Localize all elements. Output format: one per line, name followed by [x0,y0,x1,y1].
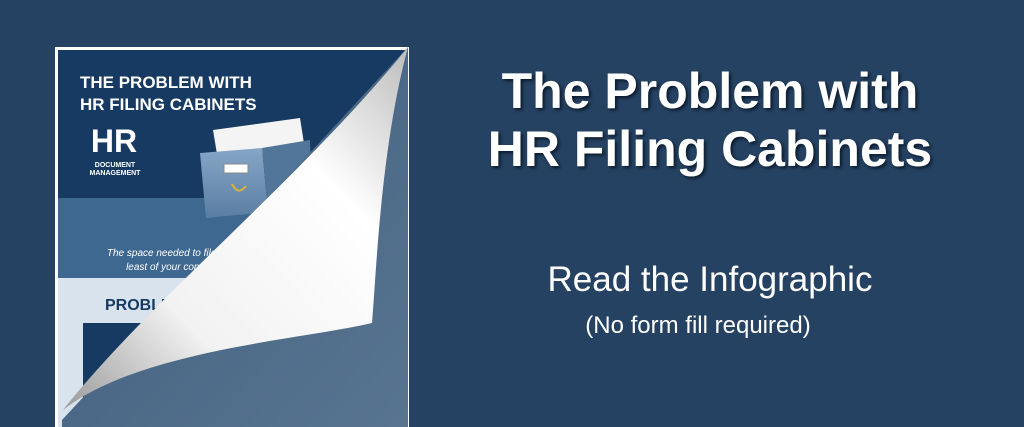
page: infographic: HR [91,123,137,159]
page: infographic: HR FILING CABINETS [80,95,257,114]
icon: filing cabinet drawer [200,118,312,218]
title: HR Filing Cabinets [488,121,932,177]
title [488,63,934,180]
page: infographic: The space needed to file is the [107,248,244,259]
call to action: Read the Infographic [548,260,872,299]
page: infographic: PROBLEMS [105,297,196,314]
page: infographic: DOCUMENT [95,162,136,169]
title: The Problem with [502,63,918,119]
page: infographic: MANAGEMENT [90,170,141,177]
page: infographic: THE PROBLEM WITH [80,73,252,92]
note: (No form fill required) [585,312,811,339]
page: infographic: least of your concerns [126,262,224,273]
page: infographic [55,47,409,427]
page curl [62,47,408,427]
